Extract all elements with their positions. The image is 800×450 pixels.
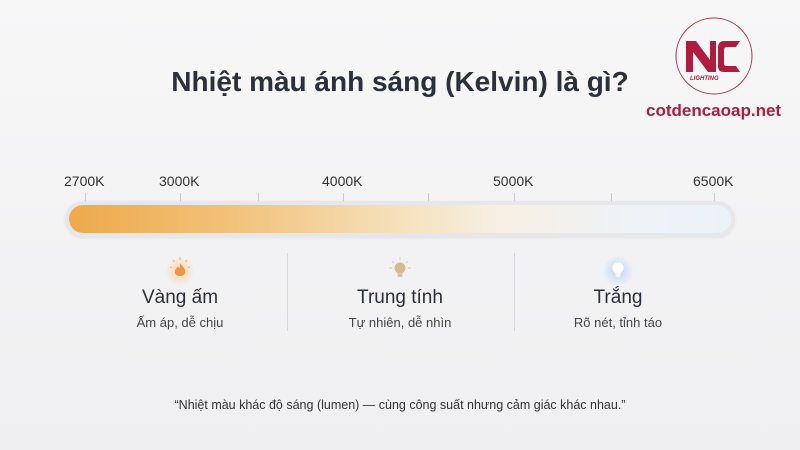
logo: [676, 18, 752, 94]
gradient bar: [65, 201, 735, 237]
heading: Trắng: [594, 287, 642, 308]
icon: bulb: [389, 257, 411, 277]
heading: Vàng ấm: [142, 287, 218, 308]
logo: LIGHTING: [690, 76, 719, 82]
quote: “Nhiệt màu khác độ sáng (lumen) — cùng công suất nhưng cảm giác khác nhau.”: [174, 398, 625, 412]
dividers: [287, 253, 288, 331]
scale labels: 4000K: [322, 173, 362, 189]
title: Nhiệt màu ánh sáng (Kelvin) là gì?: [171, 66, 629, 97]
panel: warm: [136, 257, 223, 330]
panel: white: [574, 257, 662, 330]
scale labels: [64, 173, 734, 189]
panel: neutral: [348, 257, 451, 330]
heading: Trung tính: [357, 287, 443, 308]
text: Rõ nét, tỉnh táo: [574, 315, 662, 330]
ticks: [85, 193, 715, 201]
text: Ấm áp, dễ chịu: [137, 315, 223, 330]
scale labels: 6500K: [693, 173, 733, 189]
scale labels: 5000K: [493, 173, 533, 189]
website: cotdencaoap.net: [646, 101, 781, 120]
scale labels: 3000K: [159, 173, 199, 189]
icon: white bulb: [604, 257, 632, 284]
icon: flame: [166, 257, 194, 284]
scale labels: 2700K: [64, 173, 104, 189]
text: Tự nhiên, dễ nhìn: [349, 315, 451, 330]
